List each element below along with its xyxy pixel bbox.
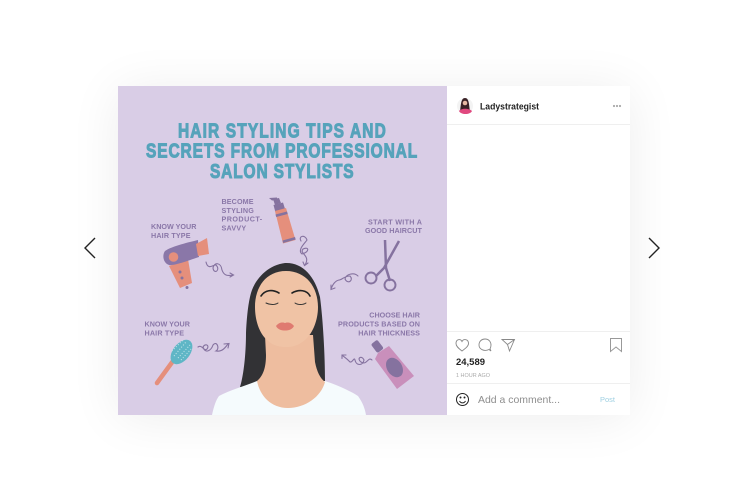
panel: post sidebar — [447, 86, 630, 415]
label: choose hair products based on hair thickness: PRODUCTS BASED ON — [338, 320, 420, 328]
avatar — [457, 98, 473, 114]
label: know your hair type (top) — [151, 222, 197, 240]
arrow: scissors swirl — [331, 274, 358, 290]
icon: conditioner bottle — [371, 340, 414, 389]
title: HAIR STYLING TIPS AND — [178, 120, 387, 142]
shirt — [212, 381, 366, 415]
label: become styling product-savvy: PRODUCT- — [222, 214, 263, 224]
arrow: bottle swirl — [300, 236, 308, 266]
panel: illustration — [118, 86, 447, 415]
likes count: 24,589 — [456, 357, 485, 367]
title: SECRETS FROM PROFESSIONAL — [146, 140, 418, 162]
icon: scissors — [366, 240, 399, 290]
label: know your hair type (bottom): HAIR TYPE — [144, 328, 184, 338]
icon: smiley — [456, 394, 468, 406]
label: choose hair products based on hair thickness: HAIR THICKNESS — [358, 328, 420, 338]
next arrow — [649, 238, 659, 258]
icon: hair dryer — [163, 238, 209, 289]
icon: round hair brush — [157, 336, 197, 383]
label: become styling product-savvy: SAVVY — [222, 224, 246, 232]
icon: heart — [456, 340, 468, 351]
eyes — [266, 303, 306, 304]
post button: Post — [600, 395, 616, 404]
arrow: dryer swirl — [206, 262, 234, 277]
icon: comment — [479, 339, 491, 351]
label: choose hair products based on hair thickness: CHOOSE HAIR — [369, 310, 421, 320]
eyebrows — [261, 291, 310, 296]
label: choose hair products based on hair thickness — [338, 310, 421, 338]
arrow: conditioner swirl — [342, 355, 372, 364]
title: SALON STYLISTS — [210, 160, 354, 182]
previous arrow — [85, 238, 95, 258]
face — [255, 271, 318, 347]
label: know your hair type (bottom) — [144, 320, 191, 338]
lips — [276, 322, 294, 330]
label: become styling product-savvy: STYLING — [222, 206, 254, 215]
label: start with a good haircut — [365, 218, 422, 235]
label: start with a good haircut: START WITH A — [368, 218, 422, 226]
icon: styling product bottle — [269, 198, 296, 244]
label: know your hair type (bottom): KNOW YOUR — [144, 320, 191, 328]
label: become styling product-savvy: BECOME — [222, 197, 254, 206]
arrow: brush swirl — [198, 344, 229, 351]
more menu — [613, 105, 621, 107]
label: start with a good haircut: GOOD HAIRCUT — [365, 226, 422, 235]
neck — [257, 335, 325, 408]
label: know your hair type (top): HAIR TYPE — [151, 231, 191, 240]
illustration: woman — [212, 263, 366, 415]
icon: bookmark — [610, 338, 622, 352]
title — [146, 120, 418, 182]
comment placeholder: Add a comment... — [478, 394, 560, 406]
label: become styling product-savvy — [222, 197, 263, 232]
label: know your hair type (top): KNOW YOUR — [151, 222, 197, 231]
icon: share — [502, 340, 514, 351]
hair — [240, 263, 325, 392]
timestamp: 1 HOUR AGO — [456, 373, 490, 379]
username: Ladystrategist — [480, 102, 539, 112]
